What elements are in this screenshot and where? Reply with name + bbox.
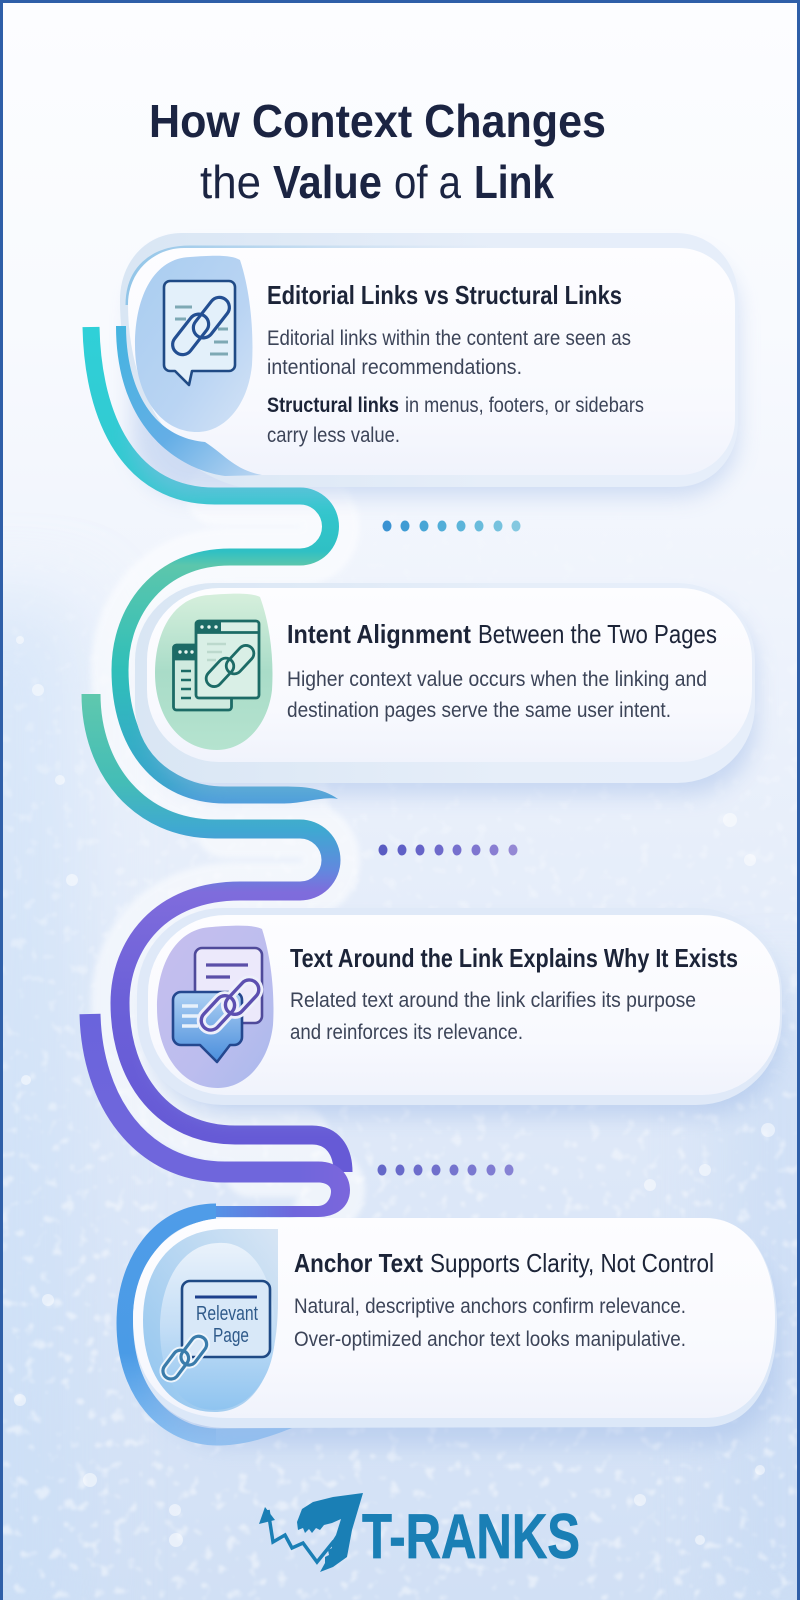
icon backdrop: card 4 (143, 1229, 278, 1412)
icon: chat bubble with chain link (164, 281, 235, 385)
title: of a (394, 156, 461, 208)
panel: anchor text supports clarity (133, 1218, 778, 1446)
title: the (200, 156, 261, 208)
body text: card 1: Editorial links within the content are seen as (267, 326, 631, 350)
heading: card 2: Between the Two Pages (478, 619, 717, 649)
body text: card 1: in menus, footers, or sidebars (405, 393, 644, 417)
body text: card 1: Structural links (267, 393, 399, 417)
heading: card 2: Intent Alignment (287, 619, 471, 649)
body text: card 3 (290, 988, 696, 1044)
dot row 1 (382, 520, 520, 532)
icon blob: card 4 (160, 1243, 275, 1410)
icon: relevant page card with chain link (160, 1281, 270, 1386)
body text: card 1 (267, 326, 644, 447)
icon: speech bubbles with chain link (173, 948, 263, 1062)
ribbon: purple connector from card 3 to card 4 (90, 1014, 350, 1446)
logo: T-RANKS (259, 1493, 580, 1572)
title (149, 95, 606, 208)
panel: intent alignment between the two pages (135, 583, 756, 795)
icon blob: card 2 (155, 594, 272, 750)
connector halos (120, 496, 340, 1212)
body text: card 2: destination pages serve the same user intent. (287, 698, 671, 722)
heading: card 1: Editorial Links vs Structural Links (267, 280, 622, 310)
body text: card 3: and reinforces its relevance. (290, 1020, 523, 1044)
body text: card 2: Higher context value occurs when the linking and (287, 667, 707, 691)
heading: card 4: Supports Clarity, Not Control (430, 1248, 714, 1278)
heading: card 2 (287, 619, 717, 649)
ribbon: green to purple connector from card 2 to card 3 (91, 694, 343, 1172)
body text: card 2 (287, 667, 707, 722)
panel: editorial links vs structural links (116, 233, 738, 497)
body text: card 3: Related text around the link clarifies its purpose (290, 988, 696, 1012)
accent band: card 1 (116, 326, 262, 476)
title: Value (273, 156, 382, 208)
dot row 2 (378, 844, 518, 856)
icon blob: card 1 (135, 256, 252, 432)
body text: card 1: carry less value. (267, 423, 400, 447)
icon: relevant page card with chain link: Page (213, 1325, 249, 1347)
dot row 3 (378, 1164, 514, 1176)
body text: card 4: Natural, descriptive anchors confirm relevance. (294, 1294, 686, 1318)
icon blob: card 3 (157, 926, 274, 1088)
body text: card 4: Over-optimized anchor text looks manipulative. (294, 1327, 686, 1351)
icon: relevant page card with chain link: Relevant (196, 1303, 258, 1325)
icon: browser windows with chain link (174, 621, 259, 710)
background (3, 568, 797, 1600)
heading: card 4 (294, 1248, 714, 1278)
panel: text around the link (137, 908, 782, 1117)
body text: card 4 (294, 1294, 686, 1351)
icon: dinosaur head with rising arrow (259, 1493, 363, 1572)
ribbon: teal connector from card 1 to card 2 (91, 327, 338, 804)
logo: T-RANKS: T-RANKS (362, 1502, 580, 1572)
title: How Context Changes (149, 95, 606, 147)
title: Link (474, 156, 554, 208)
heading: card 4: Anchor Text (294, 1248, 423, 1278)
body text: card 1: intentional recommendations. (267, 355, 522, 379)
